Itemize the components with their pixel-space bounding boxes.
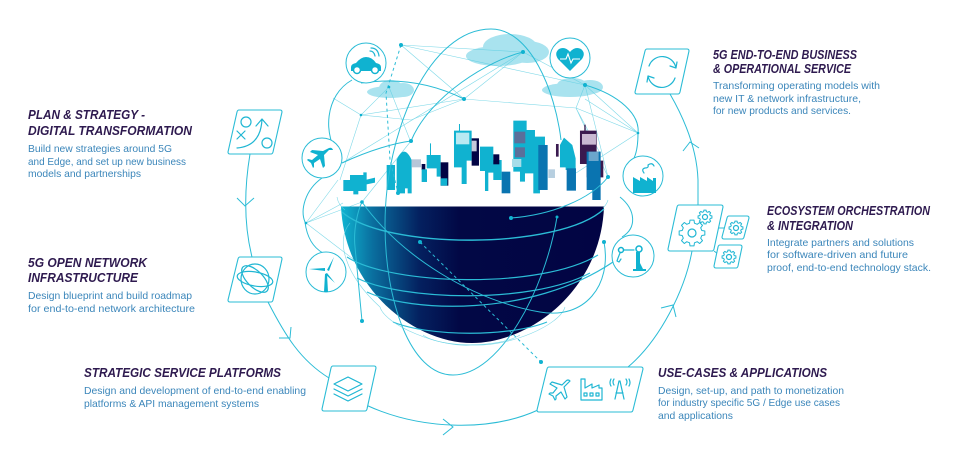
- globe orbit lines: [303, 29, 638, 375]
- tile: network globe: [228, 257, 282, 302]
- text: use cases: for industry specific 5G / Edge use cases: [658, 397, 840, 409]
- text: use cases: [658, 366, 844, 422]
- text: ecosystem: for software-driven and future: [767, 249, 908, 261]
- text: open network: [28, 256, 195, 315]
- text: plan and strategy: models and partnerships: [28, 168, 141, 180]
- text: plan and strategy: and Edge, and set up new business: [28, 156, 186, 168]
- skyline: [343, 121, 603, 200]
- text: open network: INFRASTRUCTURE: [28, 271, 139, 285]
- tile: use cases: [537, 367, 643, 412]
- network nodes: [305, 43, 639, 364]
- text: ecosystem: ECOSYSTEM ORCHESTRATION: [767, 204, 931, 218]
- text: plan and strategy: DIGITAL TRANSFORMATION: [28, 124, 193, 138]
- icon: plane: [302, 138, 342, 178]
- icon: heart: [550, 38, 590, 78]
- bowl of the globe: [341, 206, 604, 343]
- text: open network: Design blueprint and build roadmap: [28, 290, 192, 302]
- text: business service: [713, 48, 880, 117]
- text: service platforms: [84, 366, 306, 410]
- text: service platforms: platforms & API management systems: [84, 398, 259, 410]
- tile: strategy: [228, 110, 282, 154]
- icon: factory: [623, 156, 663, 196]
- tile: sync: [635, 49, 689, 94]
- text: service platforms: STRATEGIC SERVICE PLATFORMS: [84, 366, 282, 380]
- text: use cases: and applications: [658, 410, 733, 422]
- dashed connectors: [386, 45, 541, 362]
- text: open network: for end-to-end network architecture: [28, 303, 195, 315]
- icon: robot arm: [612, 235, 654, 277]
- tile: gear small bottom: [714, 245, 742, 268]
- text: ecosystem: proof, end-to-end technology stack.: [767, 262, 931, 274]
- text: business service: new IT & network infrastructure,: [713, 93, 861, 105]
- text: use cases: Design, set-up, and path to monetization: [658, 385, 844, 397]
- icon: wind turbine: [306, 252, 346, 292]
- tile: layers: [322, 366, 376, 411]
- text: open network: 5G OPEN NETWORK: [28, 256, 148, 270]
- text: plan and strategy: Build new strategies around 5G: [28, 143, 172, 155]
- icon: car: [346, 43, 386, 83]
- text: business service: Transforming operating models with: [713, 80, 880, 92]
- text: business service: for new products and services.: [713, 105, 851, 117]
- text: service platforms: Design and development of end-to-end enabling: [84, 385, 306, 397]
- tile: gears: [668, 205, 723, 251]
- text: ecosystem: [767, 204, 931, 274]
- text: ecosystem: Integrate partners and solutions: [767, 237, 914, 249]
- text: business service: 5G END-TO-END BUSINESS: [713, 48, 858, 62]
- text: use cases: USE-CASES & APPLICATIONS: [658, 366, 828, 380]
- mesh network lines: [306, 45, 638, 262]
- text: plan and strategy: [28, 108, 193, 180]
- clouds: [367, 34, 603, 98]
- tile: gear small top: [722, 216, 749, 239]
- cycle arrows: [237, 94, 727, 435]
- text: plan and strategy: PLAN & STRATEGY -: [28, 108, 145, 122]
- text: business service: & OPERATIONAL SERVICE: [713, 62, 852, 76]
- text: ecosystem: & INTEGRATION: [767, 219, 854, 233]
